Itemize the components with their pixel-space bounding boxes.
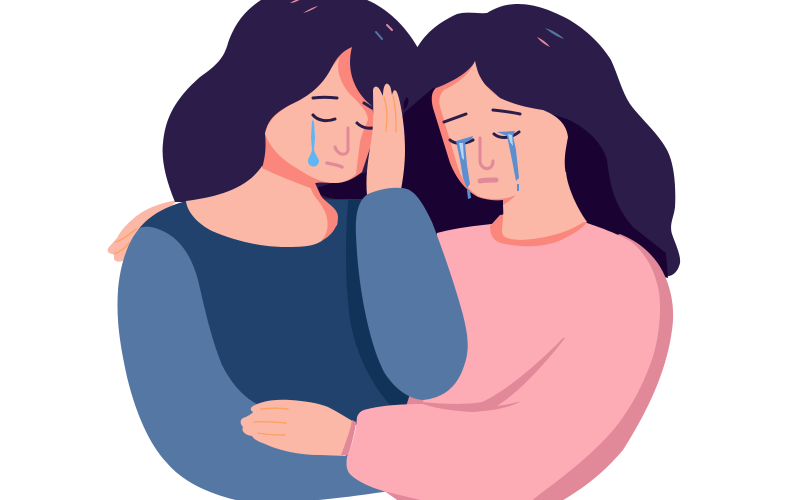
left woman's hair	[163, 0, 425, 202]
right woman's hand on the other's arm	[241, 400, 356, 456]
top shadow	[380, 234, 673, 500]
tear	[308, 120, 319, 166]
mouth	[327, 163, 342, 167]
left woman's neck	[186, 166, 338, 247]
pink sleeve crease	[423, 338, 565, 412]
face skin	[439, 61, 587, 230]
left woman's lower sleeve	[117, 227, 390, 500]
left woman's face	[262, 47, 376, 188]
right woman's face	[432, 61, 587, 230]
top body	[420, 223, 660, 500]
eyebrows and closed eyes	[313, 97, 373, 128]
dark back hair of the right woman	[310, 88, 668, 278]
face shadow	[432, 61, 520, 210]
right woman's neck and collar	[490, 172, 587, 246]
eyebrows and closed eyes	[444, 110, 520, 143]
left woman's dark blue top	[138, 199, 430, 425]
left woman's raised hand	[366, 84, 405, 195]
tear: left cheek	[456, 136, 473, 199]
right woman's pink forearm	[347, 404, 500, 500]
tear: right cheek	[497, 131, 519, 191]
right woman's hair	[407, 4, 680, 276]
nose	[480, 138, 493, 169]
face skin	[265, 57, 368, 183]
left woman's raised sleeve	[356, 188, 468, 400]
mouth	[480, 180, 496, 181]
face shadow	[262, 47, 376, 188]
right woman's pink top	[380, 223, 673, 500]
hand behind the right woman's back	[108, 200, 178, 262]
nose	[335, 128, 348, 154]
